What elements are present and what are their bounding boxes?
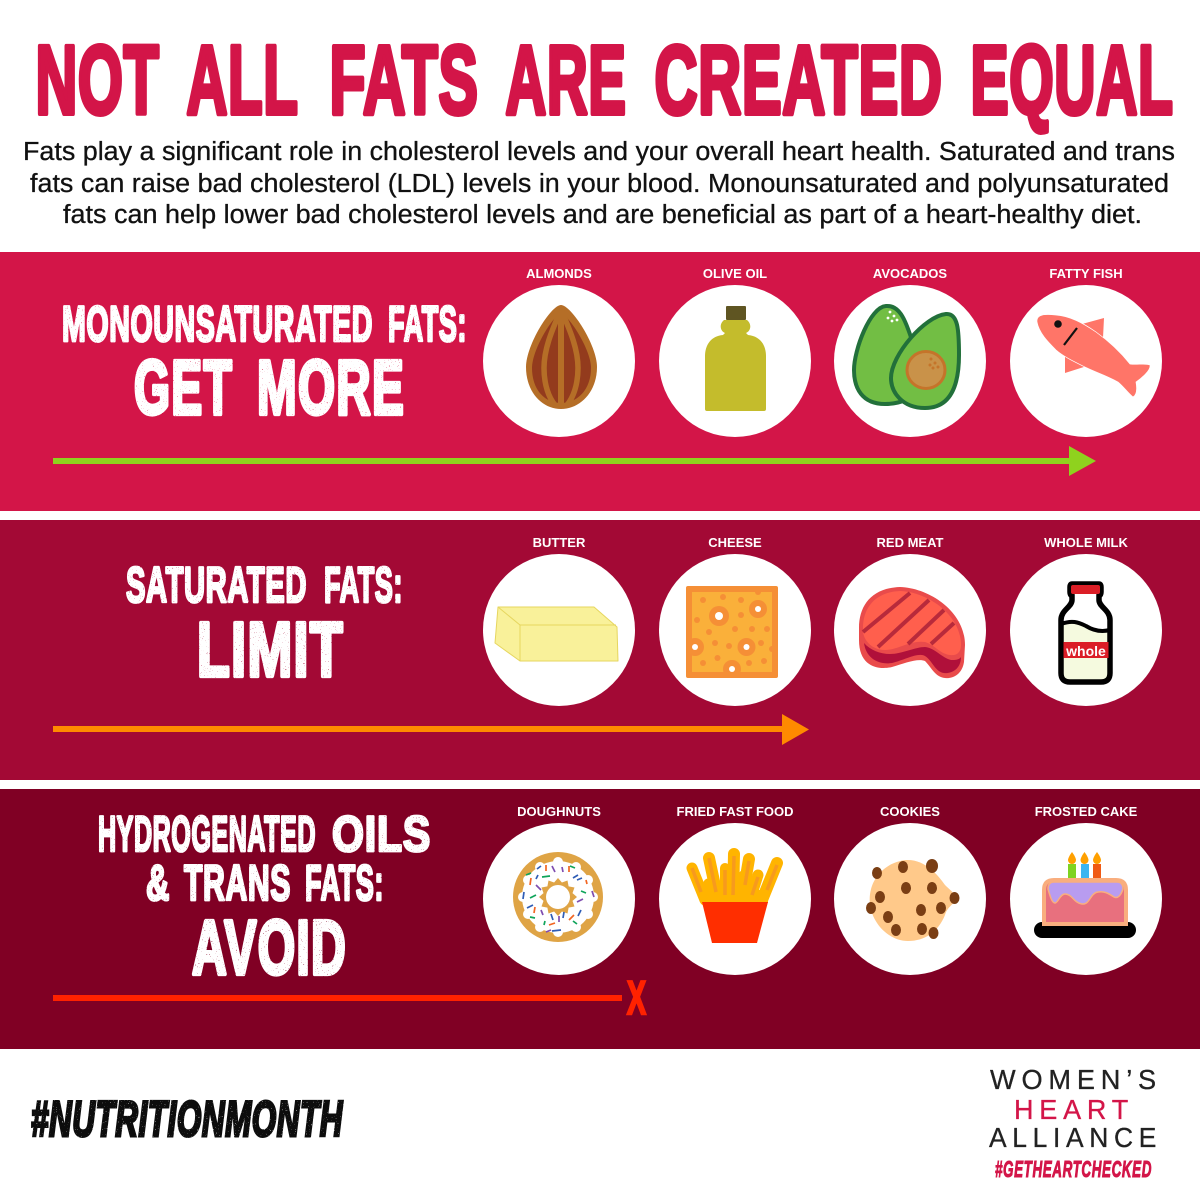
heading: hydrogenated oils and trans fats avoid: TRANS: [184, 855, 291, 911]
hashtag: nutrition month: #NUTRITIONMONTH: [31, 1091, 343, 1147]
logo: women's heart alliance: WOMEN’S: [990, 1064, 1162, 1095]
label: almonds: ALMONDS: [526, 266, 592, 281]
heading: monounsaturated fats get more: [62, 296, 467, 431]
icon: fried fast food: [659, 823, 811, 975]
intro paragraph: fats can raise bad cholesterol (LDL) levels in your blood. Monounsaturated and polyunsaturated: [30, 170, 1169, 198]
label: frosted cake: FROSTED CAKE: [1035, 804, 1138, 819]
icon: almond: [483, 285, 635, 437]
icon: cheese: [659, 554, 811, 706]
title: ARE: [506, 26, 626, 134]
heading: saturated fats limit: SATURATED: [126, 557, 307, 613]
heading: saturated fats limit: [126, 557, 403, 693]
heading: hydrogenated oils and trans fats avoid: OILS: [332, 806, 431, 862]
panel: monounsaturated fats: [0, 252, 1200, 511]
title: NOT: [36, 26, 160, 134]
logo: women's heart alliance: [989, 1064, 1162, 1182]
heading: saturated fats limit: LIMIT: [197, 607, 344, 693]
label: cheese: CHEESE: [708, 535, 762, 550]
label: butter: BUTTER: [533, 535, 586, 550]
panel: saturated fats: [0, 520, 1200, 780]
marker: red line with X: [53, 971, 646, 1024]
intro paragraph: [23, 138, 1175, 229]
label: doughnuts: DOUGHNUTS: [517, 804, 601, 819]
label: cookies: COOKIES: [880, 804, 940, 819]
marker: red line with X: X: [627, 971, 646, 1024]
title: [36, 26, 1174, 134]
icon: butter: [483, 554, 635, 706]
label: whole: whole: [1065, 643, 1106, 659]
arrow: get more: [53, 446, 1096, 476]
heading: monounsaturated fats get more: GET: [134, 345, 233, 431]
icon: whole milk bottle: [1010, 554, 1162, 706]
icon: doughnut: [483, 823, 635, 975]
icon: fatty fish: [1010, 285, 1162, 437]
icon: olive oil bottle: [659, 285, 811, 437]
heading: monounsaturated fats get more: FATS:: [388, 296, 467, 352]
icon: frosted cake: [1010, 823, 1162, 975]
heading: monounsaturated fats get more: MORE: [257, 345, 405, 431]
label: avocados: AVOCADOS: [873, 266, 947, 281]
title: FATS: [330, 26, 478, 134]
intro paragraph: Fats play a significant role in cholesterol levels and your overall heart health. Saturated and trans: [23, 138, 1175, 166]
label: fried fast food: FRIED FAST FOOD: [676, 804, 794, 819]
icon: avocados: [834, 285, 986, 437]
intro paragraph: fats can help lower bad cholesterol levels and are beneficial as part of a heart-healthy diet.: [63, 201, 1142, 229]
panel: hydrogenated oils and trans fats: [0, 789, 1200, 1049]
heading: hydrogenated oils and trans fats avoid: HYDROGENATED: [98, 806, 316, 862]
icon: cookie: [834, 823, 986, 975]
icon: red meat: [834, 554, 986, 706]
label: fatty fish: FATTY FISH: [1049, 266, 1123, 281]
arrow: limit: [53, 714, 809, 745]
logo: women's heart alliance: ALLIANCE: [989, 1122, 1162, 1153]
label: olive oil: OLIVE OIL: [703, 266, 767, 281]
heading: hydrogenated oils and trans fats avoid: AVOID: [192, 905, 347, 991]
heading: hydrogenated oils and trans fats avoid: FATS:: [305, 855, 384, 911]
heading: monounsaturated fats get more: MONOUNSATURATED: [62, 296, 373, 352]
label: red meat: RED MEAT: [877, 535, 944, 550]
title: CREATED: [654, 26, 942, 134]
heading: hydrogenated oils and trans fats avoid: [98, 806, 431, 991]
title: ALL: [186, 26, 298, 134]
label: whole milk: WHOLE MILK: [1044, 535, 1128, 550]
heading: hydrogenated oils and trans fats avoid: &: [146, 855, 170, 911]
logo: women's heart alliance: HEART: [1014, 1094, 1134, 1125]
heading: saturated fats limit: FATS:: [324, 557, 403, 613]
